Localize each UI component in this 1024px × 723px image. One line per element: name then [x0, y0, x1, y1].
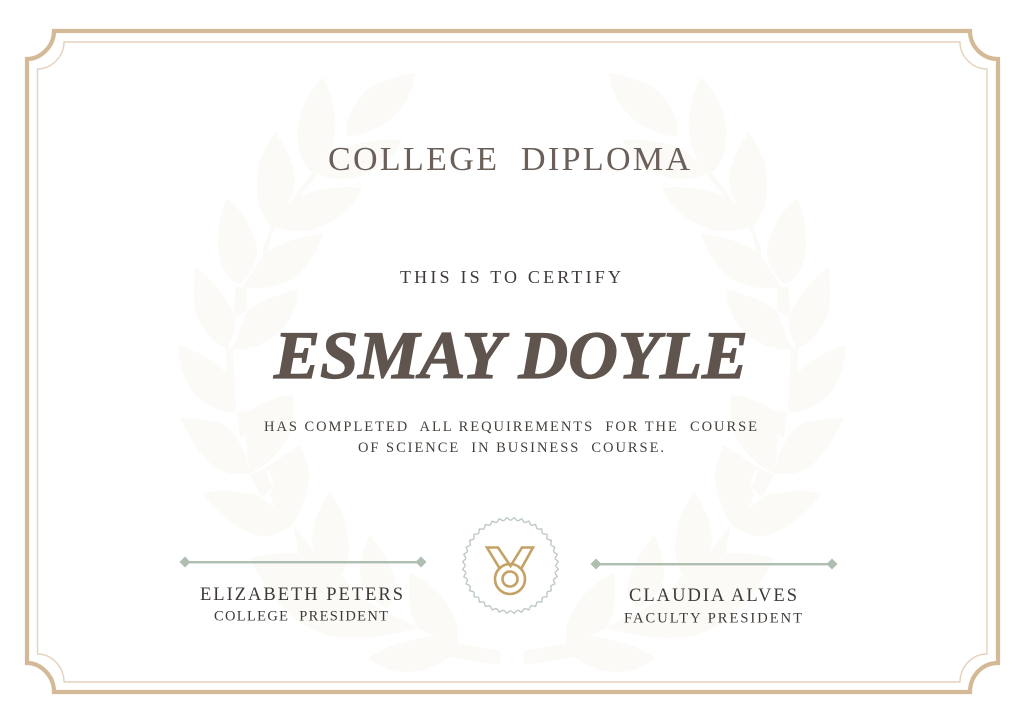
certify line: THIS IS TO CERTIFY [400, 267, 621, 287]
left signature line [180, 556, 426, 568]
wreath left branch [178, 73, 500, 672]
right signatory [624, 586, 802, 626]
seal: serrated ring [462, 517, 559, 614]
left signatory: ELIZABETH PETERS [200, 585, 403, 605]
watermark: laurel wreath [178, 73, 846, 672]
recipient name: ESMAY DOYLE [273, 317, 748, 393]
title: COLLEGE DIPLOMA [328, 141, 690, 178]
wreath right branch [524, 73, 846, 672]
right signatory: CLAUDIA ALVES [629, 586, 797, 606]
course description [264, 419, 757, 456]
course description: OF SCIENCE IN BUSINESS COURSE. [358, 440, 664, 456]
right signature line [590, 558, 838, 570]
course description: HAS COMPLETED ALL REQUIREMENTS FOR THE COURSE [264, 419, 757, 435]
right signatory: FACULTY PRESIDENT [624, 610, 802, 626]
left signatory: COLLEGE PRESIDENT [214, 608, 388, 624]
icon: medal [487, 548, 533, 594]
left signatory [200, 585, 403, 624]
